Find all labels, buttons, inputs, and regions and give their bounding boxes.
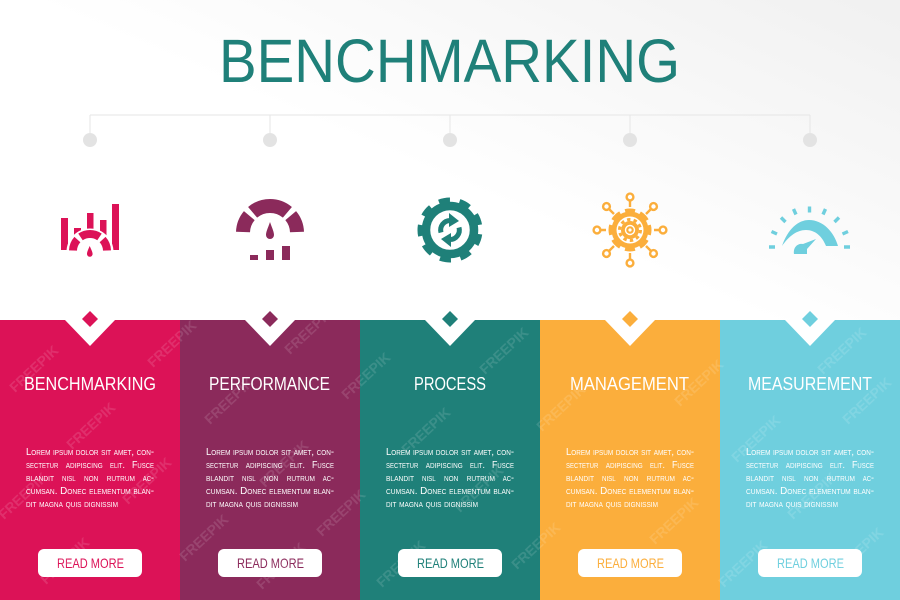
icon: management gear network bbox=[594, 194, 666, 266]
button bbox=[218, 549, 322, 577]
marker diamond bbox=[622, 311, 638, 327]
icon: process gear bbox=[417, 197, 483, 263]
icon: performance gauge bbox=[243, 206, 297, 260]
body text: Fusce bbox=[852, 460, 874, 471]
watermarks: FREEPIK bbox=[451, 462, 506, 515]
body text: ac- bbox=[323, 473, 334, 484]
body text bbox=[386, 447, 514, 510]
panel: management bbox=[540, 311, 720, 600]
watermarks: FREEPIK bbox=[201, 374, 256, 427]
body text: cumsan. Donec elementum blan- bbox=[26, 486, 154, 497]
button: READ MORE bbox=[597, 555, 664, 571]
body text: sectetur bbox=[206, 460, 238, 471]
marker diamond bbox=[82, 311, 98, 327]
body text: ac- bbox=[683, 473, 694, 484]
body text: adipiscing bbox=[606, 460, 643, 471]
button bbox=[578, 549, 682, 577]
button: READ MORE bbox=[57, 555, 124, 571]
watermarks: FREEPIK bbox=[256, 437, 311, 490]
heading: measurement: MEASUREMENT bbox=[748, 373, 872, 394]
body text: adipiscing bbox=[66, 460, 103, 471]
watermarks: FREEPIK bbox=[373, 537, 428, 590]
body text: cumsan. Donec elementum blan- bbox=[566, 486, 694, 497]
watermarks: FREEPIK bbox=[671, 356, 726, 409]
body text: sectetur bbox=[566, 460, 598, 471]
icon: measurement speedometer bbox=[769, 206, 850, 254]
body text: non bbox=[84, 473, 98, 484]
body text: adipiscing bbox=[786, 460, 823, 471]
heading: benchmarking: BENCHMARKING bbox=[24, 373, 156, 394]
watermarks: FREEPIK bbox=[63, 399, 118, 452]
body text: cumsan. Donec elementum blan- bbox=[746, 486, 874, 497]
marker diamond bbox=[802, 311, 818, 327]
body text: blandit bbox=[566, 473, 595, 484]
watermarks bbox=[0, 304, 894, 592]
body text: adipiscing bbox=[426, 460, 463, 471]
body text: nisl bbox=[422, 473, 436, 484]
body text: nisl bbox=[602, 473, 616, 484]
body text: Fusce bbox=[492, 460, 514, 471]
body text: elit. bbox=[290, 460, 305, 471]
body text: ac- bbox=[143, 473, 154, 484]
body text: Lorem ipsum dolor sit amet, con- bbox=[746, 447, 874, 458]
button: READ MORE bbox=[417, 555, 484, 571]
body text: nisl bbox=[242, 473, 256, 484]
body text: sectetur bbox=[386, 460, 418, 471]
watermarks: FREEPIK bbox=[281, 304, 336, 357]
body text: dit magna quis dignissim bbox=[746, 499, 838, 510]
body text: blandit bbox=[386, 473, 415, 484]
icon: bars with gauge bbox=[61, 204, 119, 257]
panel: process bbox=[360, 311, 540, 600]
button bbox=[758, 549, 862, 577]
body text: non bbox=[624, 473, 638, 484]
watermarks: FREEPIK bbox=[839, 374, 894, 427]
body text: nisl bbox=[62, 473, 76, 484]
watermarks: FREEPIK bbox=[784, 469, 839, 522]
body text: blandit bbox=[26, 473, 55, 484]
watermarks: FREEPIK bbox=[715, 537, 770, 590]
body text: adipiscing bbox=[246, 460, 283, 471]
panel: measurement bbox=[720, 311, 900, 600]
watermarks: FREEPIK bbox=[508, 519, 563, 572]
watermarks: FREEPIK bbox=[338, 349, 393, 402]
body text: sectetur bbox=[746, 460, 778, 471]
watermarks: FREEPIK bbox=[533, 381, 588, 434]
body text: nisl bbox=[782, 473, 796, 484]
body text: dit magna quis dignissim bbox=[206, 499, 298, 510]
title: BENCHMARKING bbox=[219, 27, 680, 96]
connector timeline bbox=[83, 115, 817, 147]
body text bbox=[746, 447, 874, 510]
heading: performance: PERFORMANCE bbox=[209, 373, 330, 394]
body text: rutrum bbox=[827, 473, 855, 484]
body text bbox=[206, 447, 334, 510]
body text: rutrum bbox=[647, 473, 675, 484]
body text: elit. bbox=[110, 460, 125, 471]
panel: benchmarking bbox=[0, 311, 180, 600]
body text: dit magna quis dignissim bbox=[386, 499, 478, 510]
body text: non bbox=[444, 473, 458, 484]
watermarks: FREEPIK bbox=[6, 342, 61, 395]
heading: process: PROCESS bbox=[414, 373, 486, 394]
body text: Lorem ipsum dolor sit amet, con- bbox=[386, 447, 514, 458]
body text: rutrum bbox=[287, 473, 315, 484]
button: READ MORE bbox=[237, 555, 304, 571]
body text: cumsan. Donec elementum blan- bbox=[206, 486, 334, 497]
body text: Lorem ipsum dolor sit amet, con- bbox=[26, 447, 154, 458]
button: READ MORE bbox=[777, 555, 844, 571]
watermarks: FREEPIK bbox=[728, 412, 783, 465]
body text: cumsan. Donec elementum blan- bbox=[386, 486, 514, 497]
watermarks: FREEPIK bbox=[831, 524, 886, 577]
body text: elit. bbox=[470, 460, 485, 471]
button bbox=[38, 549, 142, 577]
panel: performance bbox=[180, 311, 360, 600]
button bbox=[398, 549, 502, 577]
body text bbox=[26, 447, 154, 510]
body text: Fusce bbox=[672, 460, 694, 471]
watermarks: FREEPIK bbox=[398, 404, 453, 457]
watermarks: FREEPIK bbox=[313, 486, 368, 539]
body text: rutrum bbox=[107, 473, 135, 484]
body text: Lorem ipsum dolor sit amet, con- bbox=[206, 447, 334, 458]
body text: elit. bbox=[830, 460, 845, 471]
watermarks: FREEPIK bbox=[119, 454, 174, 507]
watermarks: FREEPIK bbox=[176, 511, 231, 564]
body text: sectetur bbox=[26, 460, 58, 471]
body text bbox=[566, 447, 694, 510]
body text: Lorem ipsum dolor sit amet, con- bbox=[566, 447, 694, 458]
body text: blandit bbox=[746, 473, 775, 484]
watermarks: FREEPIK bbox=[814, 324, 869, 377]
marker diamond bbox=[442, 311, 458, 327]
body text: elit. bbox=[650, 460, 665, 471]
body text: ac- bbox=[863, 473, 874, 484]
body text: rutrum bbox=[467, 473, 495, 484]
body text: dit magna quis dignissim bbox=[26, 499, 118, 510]
body text: non bbox=[804, 473, 818, 484]
marker diamond bbox=[262, 311, 278, 327]
watermarks: FREEPIK bbox=[646, 494, 701, 547]
body text: Fusce bbox=[312, 460, 334, 471]
body text: non bbox=[264, 473, 278, 484]
body text: dit magna quis dignissim bbox=[566, 499, 658, 510]
watermarks: FREEPIK bbox=[253, 539, 308, 592]
heading: management: MANAGEMENT bbox=[570, 373, 689, 394]
watermarks: FREEPIK bbox=[476, 324, 531, 377]
watermarks: FREEPIK bbox=[144, 317, 199, 370]
body text: Fusce bbox=[132, 460, 154, 471]
body text: ac- bbox=[503, 473, 514, 484]
body text: blandit bbox=[206, 473, 235, 484]
watermarks: FREEPIK bbox=[37, 534, 92, 587]
